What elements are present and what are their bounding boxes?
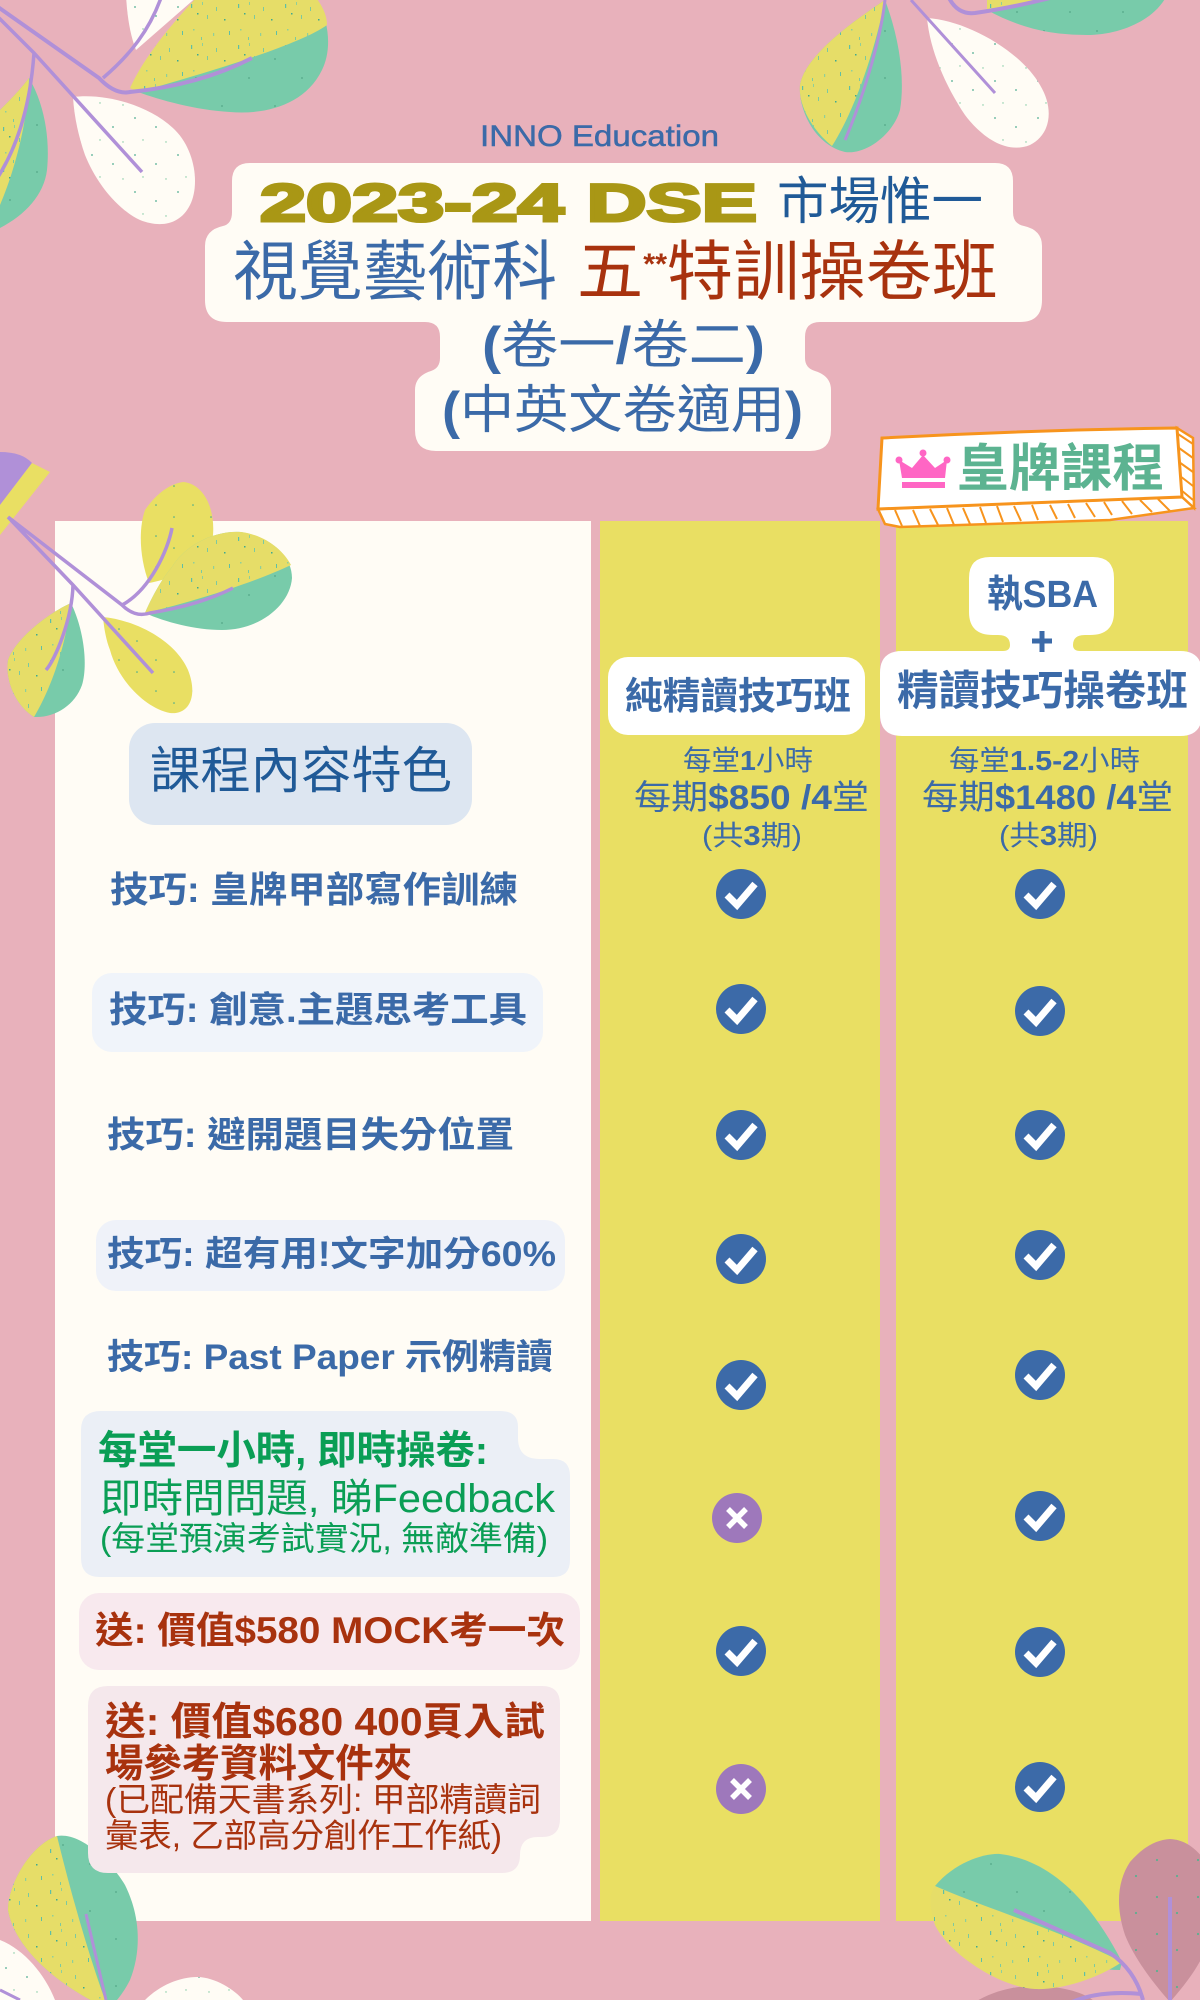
- leaves: top left: [0, 0, 328, 228]
- title block: [205, 163, 1042, 451]
- badge: signature course: [878, 428, 1194, 527]
- row 8 label: free folder: 場參考資料文件夾: [105, 1743, 412, 1786]
- icon: crown: [896, 450, 950, 488]
- pricing: skills class: [634, 745, 869, 851]
- title subject: 視覺藝術科: [233, 235, 557, 308]
- pricing: SBA plus skills class: [922, 745, 1173, 851]
- row 8 label: free folder: 送: 價值$680 400頁入試: [105, 1701, 545, 1744]
- title class name: **: [643, 248, 667, 281]
- title class name: 特訓操卷班: [667, 235, 998, 308]
- leaves: top right: [800, 0, 1167, 152]
- icon: cross row 8 column 1: [716, 1764, 766, 1814]
- title class name: 五: [577, 235, 642, 308]
- row 7 label: free mock: 送: 價值$580 MOCK考一次: [95, 1610, 565, 1651]
- column header: SBA plus skills class: [880, 557, 1200, 736]
- title language: (中英文卷適用): [442, 382, 803, 440]
- row 6 label: live practice: 每堂一小時, 即時操卷:: [98, 1429, 488, 1473]
- column header: SBA plus skills class: 執SBA: [987, 574, 1098, 616]
- leaves: middle left: [0, 452, 292, 717]
- column header: SBA plus skills class: 精讀技巧操卷班: [897, 667, 1188, 714]
- icon: check row 5 column 1: [716, 1360, 766, 1410]
- title year: 2023-24 DSE: [260, 174, 757, 233]
- icon: check row 6 column 2: [1015, 1491, 1065, 1541]
- row 2 label: [92, 973, 543, 1052]
- pricing: skills class: 每期$850 /4 堂: [634, 779, 869, 817]
- icon: check row 3 column 1: [716, 1110, 766, 1160]
- row 3 label: 技巧: 避開題目失分位置: [107, 1114, 514, 1155]
- row 2 label: 技巧: 創意.主題思考工具: [109, 989, 527, 1030]
- row 6 label: live practice: 即時問問題, 睇Feedback: [100, 1477, 556, 1521]
- icon: check row 7 column 1: [716, 1626, 766, 1676]
- icon: cross row 6 column 1: [712, 1493, 762, 1543]
- column header: skills class: [608, 657, 865, 735]
- badge label: 皇牌課程: [957, 440, 1164, 497]
- brand name: INNO Education: [480, 120, 719, 153]
- icon: check row 5 column 2: [1015, 1350, 1065, 1400]
- row 7 label: free mock: [79, 1593, 580, 1670]
- title papers: (卷一/卷二): [482, 317, 765, 375]
- leaves: bottom left: [0, 1836, 243, 2000]
- icon: check row 4 column 2: [1015, 1230, 1065, 1280]
- row 4 label: 技巧: 超有用!文字加分60%: [107, 1235, 556, 1274]
- pricing: skills class: 每堂1小時: [683, 745, 813, 776]
- icon: check row 1 column 2: [1015, 869, 1065, 919]
- column header: skills class: 純精讀技巧班: [625, 675, 851, 717]
- pricing: SBA plus skills class: 每堂1.5-2小時: [949, 745, 1140, 776]
- row 8 label: free folder: (已配備天書系列: 甲部精讀詞: [105, 1781, 541, 1818]
- icon: check row 4 column 1: [716, 1234, 766, 1284]
- icon: check row 2 column 2: [1015, 986, 1065, 1036]
- icon: check row 3 column 2: [1015, 1110, 1065, 1160]
- panel: SBA plus skills class column: [896, 521, 1188, 1921]
- title market only: 市場惟一: [777, 173, 983, 230]
- row 6 label: live practice: (每堂預演考試實況, 無敵準備): [100, 1520, 548, 1557]
- title background bubble: [205, 163, 1042, 451]
- heading: course features: [129, 723, 472, 825]
- heading: course features: 課程內容特色: [150, 743, 452, 799]
- icon: check row 1 column 1: [716, 869, 766, 919]
- pricing: SBA plus skills class: 每期$1480 /4 堂: [922, 779, 1173, 817]
- row 6 label: live practice: [81, 1411, 570, 1577]
- pricing: skills class: (共3期): [702, 820, 802, 851]
- row 8 label: free folder: [88, 1686, 560, 1873]
- panel: skills reading class column: [600, 521, 880, 1921]
- icon: check row 2 column 1: [716, 984, 766, 1034]
- leaves: bottom right: [930, 1839, 1200, 2000]
- icon: check row 7 column 2: [1015, 1627, 1065, 1677]
- row 5 label: 技巧: Past Paper 示例精讀: [107, 1338, 553, 1377]
- icon: check row 8 column 2: [1015, 1762, 1065, 1812]
- row 4 label: [96, 1220, 565, 1291]
- pricing: SBA plus skills class: (共3期): [999, 820, 1098, 851]
- panel: course features column: [55, 521, 591, 1921]
- row 1 label: 技巧: 皇牌甲部寫作訓練: [110, 869, 518, 910]
- row 8 label: free folder: 彙表, 乙部高分創作工作紙): [105, 1817, 502, 1854]
